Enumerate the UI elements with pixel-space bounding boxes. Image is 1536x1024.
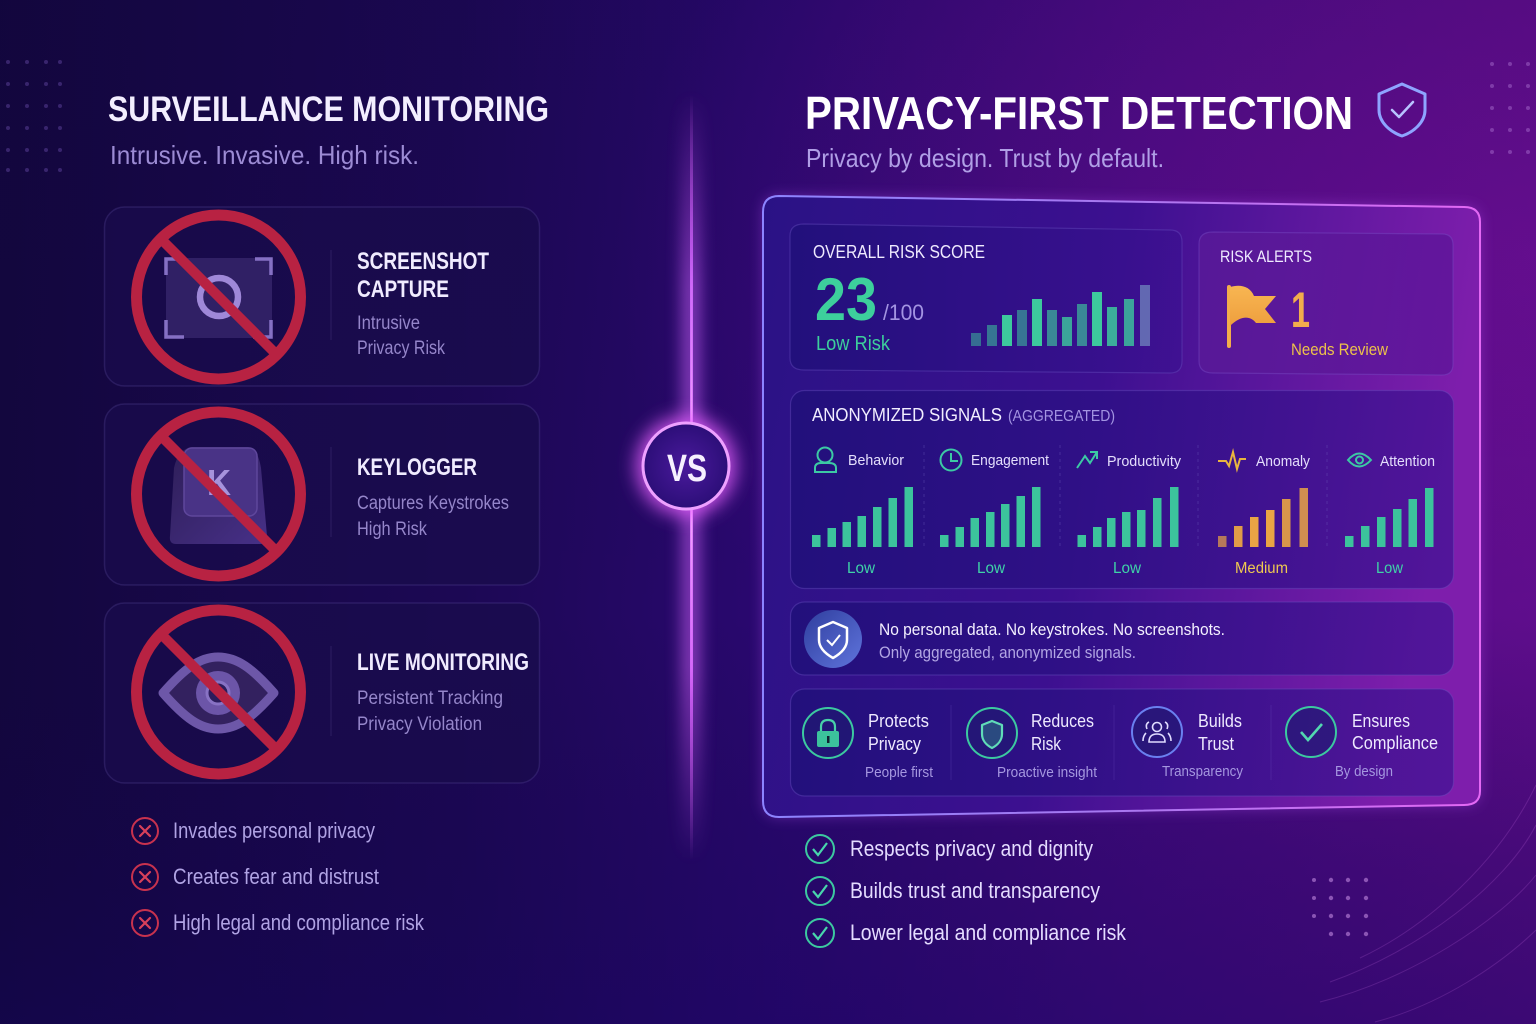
subtitle: right: Privacy by design. Trust by default. bbox=[806, 143, 1164, 173]
signal: engagement: Engagement bbox=[971, 452, 1050, 469]
card text: keylogger bbox=[357, 454, 509, 540]
signal: attention: Low bbox=[1376, 560, 1404, 577]
card: privacy statement: Only aggregated, anonymized signals. bbox=[879, 643, 1136, 662]
card text: screenshot capture: Intrusive bbox=[357, 313, 420, 334]
card text: keylogger: High Risk bbox=[357, 519, 427, 540]
bullet: creates fear and distrust: Creates fear and distrust bbox=[173, 864, 379, 889]
panel: live monitoring bbox=[104, 603, 540, 783]
signal: attention: Attention bbox=[1380, 453, 1435, 470]
vs badge: VS bbox=[667, 448, 707, 490]
signal: anomaly: Anomaly bbox=[1256, 453, 1310, 470]
benefit: protects privacy: People first bbox=[865, 765, 933, 781]
icon: keyboard key: K bbox=[207, 462, 231, 503]
card: risk alerts bbox=[1199, 232, 1453, 375]
icon: pulse bbox=[1218, 452, 1246, 469]
panel: keylogger bbox=[104, 404, 540, 585]
card text: live monitoring: Privacy Violation bbox=[357, 714, 482, 735]
icon: shield bbox=[967, 708, 1017, 758]
benefit: protects privacy: Protects bbox=[868, 711, 929, 731]
divider line bbox=[682, 95, 700, 860]
signal: attention bbox=[1345, 453, 1435, 577]
icon: trend arrow bbox=[1077, 452, 1097, 468]
card: privacy statement: No personal data. No keystrokes. No screenshots. bbox=[879, 620, 1225, 639]
benefit: reduces risk: Proactive insight bbox=[997, 765, 1097, 781]
benefit: builds trust bbox=[1132, 707, 1244, 780]
bullet: respects privacy: Respects privacy and dignity bbox=[850, 836, 1093, 861]
card: benefits bbox=[790, 689, 1454, 796]
card text: screenshot capture bbox=[357, 248, 489, 359]
bullet: builds trust: Builds trust and transparency bbox=[850, 878, 1100, 903]
signal: behavior bbox=[812, 448, 913, 577]
card: anonymized signals bbox=[790, 390, 1454, 588]
signal: anomaly bbox=[1218, 452, 1310, 577]
signal: behavior: Low bbox=[847, 560, 876, 577]
icon: people bbox=[1132, 707, 1182, 757]
icon: camera viewfinder bbox=[166, 258, 272, 338]
signal: engagement bbox=[940, 450, 1050, 577]
icon: eye bbox=[1348, 454, 1371, 466]
icon: person bbox=[815, 448, 836, 472]
panel: dashboard bbox=[763, 196, 1480, 817]
bullet: lower legal risk: Lower legal and compliance risk bbox=[850, 920, 1127, 945]
bullet: builds trust bbox=[806, 877, 1100, 905]
subtitle: left: Intrusive. Invasive. High risk. bbox=[110, 140, 419, 170]
icon: lock bbox=[803, 708, 853, 758]
signal: productivity: Low bbox=[1113, 560, 1142, 577]
icon: clock bbox=[940, 450, 962, 470]
icon: prohibited sign bbox=[136, 215, 300, 379]
signal: engagement: Low bbox=[977, 560, 1006, 577]
list: surveillance drawbacks bbox=[132, 818, 425, 936]
card: risk alerts: RISK ALERTS bbox=[1220, 247, 1312, 266]
panel: screenshot capture bbox=[104, 207, 540, 386]
benefit: builds trust: Builds bbox=[1198, 711, 1242, 731]
bullet: invades personal privacy: Invades personal privacy bbox=[173, 818, 375, 843]
icon: keyboard key bbox=[170, 447, 267, 544]
benefit: protects privacy: Privacy bbox=[868, 734, 921, 754]
icon: prohibited sign bbox=[136, 610, 300, 774]
card text: live monitoring: LIVE MONITORING bbox=[357, 649, 529, 676]
list: privacy-first benefits bbox=[806, 835, 1127, 947]
benefit: reduces risk: Risk bbox=[1031, 734, 1062, 754]
icon: checkmark bbox=[1286, 707, 1336, 757]
card: anonymized signals: (AGGREGATED) bbox=[1008, 408, 1115, 425]
card text: screenshot capture: CAPTURE bbox=[357, 276, 449, 303]
benefit: ensures compliance bbox=[1286, 707, 1438, 780]
benefit: reduces risk bbox=[967, 708, 1097, 781]
title: privacy-first detection: PRIVACY-FIRST DETECTION bbox=[805, 87, 1353, 139]
chart: risk score bars bbox=[971, 285, 1150, 346]
benefit: protects privacy bbox=[803, 708, 933, 781]
card text: keylogger: KEYLOGGER bbox=[357, 454, 477, 481]
icon: shield badge bbox=[804, 610, 862, 668]
bullet: invades personal privacy bbox=[132, 818, 375, 844]
bullet: lower legal risk bbox=[806, 919, 1127, 947]
card text: screenshot capture: SCREENSHOT bbox=[357, 248, 489, 275]
card: risk alerts: 1 bbox=[1291, 282, 1310, 338]
card text: live monitoring bbox=[357, 649, 529, 735]
signal: behavior: Behavior bbox=[848, 452, 904, 469]
card: overall risk score bbox=[790, 224, 1182, 373]
card: anonymized signals: ANONYMIZED SIGNALS bbox=[812, 405, 1002, 425]
vs badge bbox=[636, 416, 736, 516]
card text: live monitoring: Persistent Tracking bbox=[357, 688, 503, 709]
title: surveillance monitoring: SURVEILLANCE MONITORING bbox=[108, 90, 549, 129]
card: risk alerts: Needs Review bbox=[1291, 340, 1389, 359]
icon: eye bbox=[163, 657, 274, 729]
benefit: builds trust: Trust bbox=[1198, 734, 1234, 754]
bullet: respects privacy bbox=[806, 835, 1093, 863]
card: overall risk score: Low Risk bbox=[816, 333, 891, 355]
benefit: ensures compliance: Compliance bbox=[1352, 733, 1438, 753]
card: overall risk score: /100 bbox=[883, 300, 924, 325]
bullet: high legal and compliance risk: High legal and compliance risk bbox=[173, 910, 425, 935]
signal: productivity bbox=[1077, 452, 1181, 577]
card text: screenshot capture: Privacy Risk bbox=[357, 338, 445, 359]
card: overall risk score: 23 bbox=[815, 266, 877, 333]
benefit: builds trust: Transparency bbox=[1162, 764, 1244, 780]
benefit: ensures compliance: By design bbox=[1335, 764, 1393, 780]
icon: title shield bbox=[1379, 84, 1425, 136]
signal: productivity: Productivity bbox=[1107, 453, 1181, 470]
benefit: reduces risk: Reduces bbox=[1031, 711, 1094, 731]
card text: keylogger: Captures Keystrokes bbox=[357, 493, 509, 514]
card: privacy statement bbox=[790, 602, 1454, 675]
card: overall risk score: OVERALL RISK SCORE bbox=[813, 242, 985, 262]
signal: anomaly: Medium bbox=[1235, 560, 1288, 577]
benefit: ensures compliance: Ensures bbox=[1352, 711, 1410, 731]
icon: prohibited sign bbox=[136, 412, 300, 576]
icon: flag bbox=[1227, 285, 1276, 348]
